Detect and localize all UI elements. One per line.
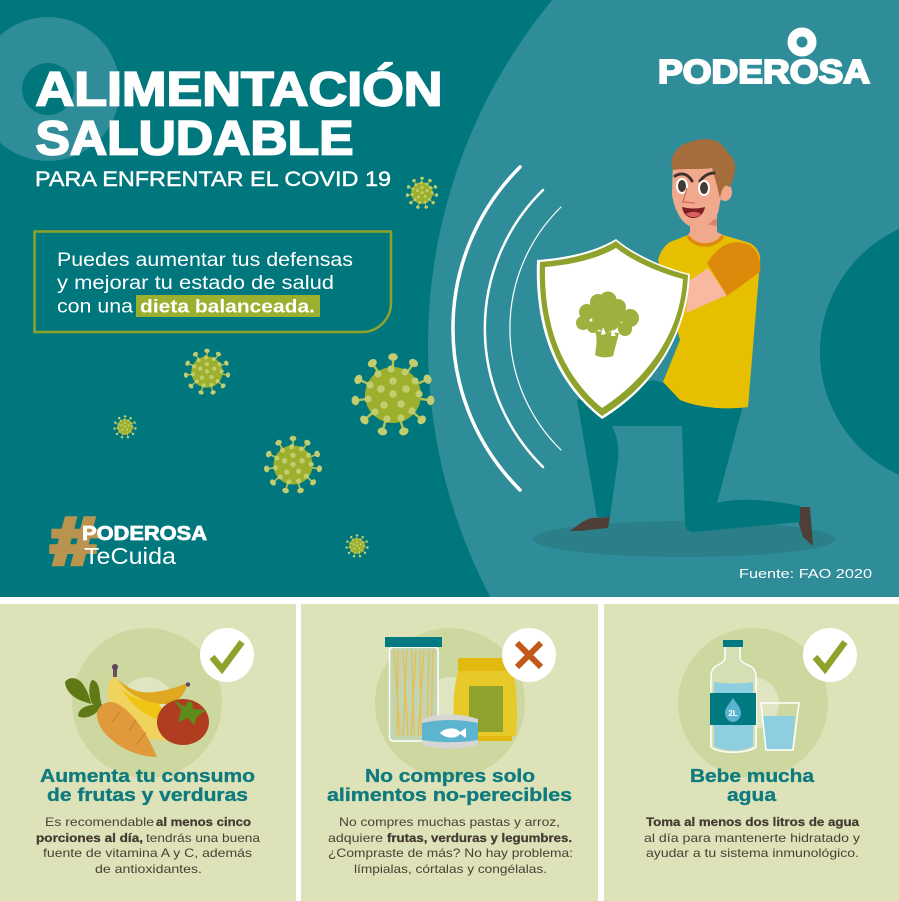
icon: tuna can <box>422 714 478 749</box>
icon: virus medium <box>264 436 322 494</box>
icon: bottle <box>710 640 756 752</box>
text block: al día para mantenerte hidratado y <box>644 831 860 845</box>
callout: Puedes aumentar tus defensas <box>57 250 353 271</box>
icon: water circle <box>678 628 828 778</box>
callout: con una <box>57 296 133 318</box>
panel: frutas y verduras <box>0 604 296 901</box>
icon: virus small bottom <box>345 534 369 558</box>
broccoli <box>576 292 639 357</box>
hashtag: # <box>51 504 97 578</box>
heading: agua <box>727 784 777 805</box>
heading <box>327 765 572 805</box>
text block: fuente de vitamina A y C, además <box>43 846 252 860</box>
panel: hero <box>0 0 899 597</box>
text block: tendrás una buena <box>146 831 261 845</box>
text block: Toma al menos dos litros de agua <box>646 815 859 829</box>
heading: de frutas y verduras <box>47 784 248 805</box>
shirt <box>658 235 760 408</box>
heading: alimentos no-perecibles <box>327 784 572 805</box>
front shoe <box>570 517 610 531</box>
icon: food circle <box>375 628 525 778</box>
hashtag: TeCuida <box>84 543 177 569</box>
icon: bottle: 2L <box>728 709 738 718</box>
illustration: kneeling man with shield <box>533 139 835 557</box>
hashtag: PODEROSA <box>82 522 207 545</box>
icon: glass <box>761 703 799 750</box>
panel: no perecibles <box>301 604 598 901</box>
hashtag <box>51 504 207 578</box>
sleeve <box>707 242 760 296</box>
icon: fruits and vegetables <box>65 664 209 757</box>
nose <box>683 188 695 203</box>
text block: de antioxidantes. <box>95 862 202 876</box>
text block: adquiere <box>328 831 384 845</box>
icon: spaghetti jar <box>385 637 442 741</box>
arm <box>686 268 727 313</box>
icon: protection arcs <box>453 167 561 490</box>
text block: al menos cinco <box>156 815 251 829</box>
icon: check <box>803 628 857 682</box>
icon: virus small left <box>113 415 137 439</box>
icon: virus top <box>406 177 438 209</box>
panel: agua <box>604 604 899 901</box>
icon: cross <box>502 628 556 682</box>
text block: No compres muchas pastas y arroz, <box>339 815 560 829</box>
trousers <box>577 380 800 532</box>
title: SALUDABLE <box>36 112 354 166</box>
text block <box>36 815 261 876</box>
back shoe <box>797 507 813 546</box>
text block: ayudar a tu sistema inmunológico. <box>646 846 859 860</box>
callout <box>34 232 391 332</box>
icon: virus medium left <box>183 349 231 395</box>
source: Fuente: FAO 2020 <box>739 566 872 581</box>
icon: check <box>200 628 254 682</box>
icon: food bag <box>454 658 517 741</box>
heading: No compres solo <box>365 765 535 786</box>
neck and collar <box>688 212 723 244</box>
brows <box>675 173 714 181</box>
shield <box>537 239 690 419</box>
face <box>672 160 722 227</box>
heading <box>40 765 255 805</box>
callout: y mejorar tu estado de salud <box>57 273 334 294</box>
heading: Bebe mucha <box>690 765 815 786</box>
eyes <box>676 178 688 194</box>
heading: Aumenta tu consumo <box>40 765 255 786</box>
ear <box>718 183 732 201</box>
heading <box>690 765 815 805</box>
icon: virus large <box>351 353 435 436</box>
text block: límpialas, córtalas y congélalas. <box>354 862 547 876</box>
logo: PODEROSA <box>658 54 870 91</box>
title <box>36 62 442 166</box>
text block <box>644 815 860 860</box>
subtitle: PARA ENFRENTAR EL COVID 19 <box>35 168 391 191</box>
icon: food circle <box>72 628 222 778</box>
text block: Es recomendable <box>45 815 155 829</box>
shadow <box>533 521 835 557</box>
text block <box>328 815 573 876</box>
callout: dieta balanceada. <box>140 296 315 316</box>
hair <box>671 139 735 198</box>
title: ALIMENTACIÓN <box>36 62 442 116</box>
text block: ¿Compraste de más? No hay problema: <box>328 846 573 860</box>
text block: frutas, verduras y legumbres. <box>387 831 572 845</box>
logo <box>658 32 870 91</box>
text block: porciones al día, <box>36 831 143 845</box>
mouth <box>682 207 705 218</box>
